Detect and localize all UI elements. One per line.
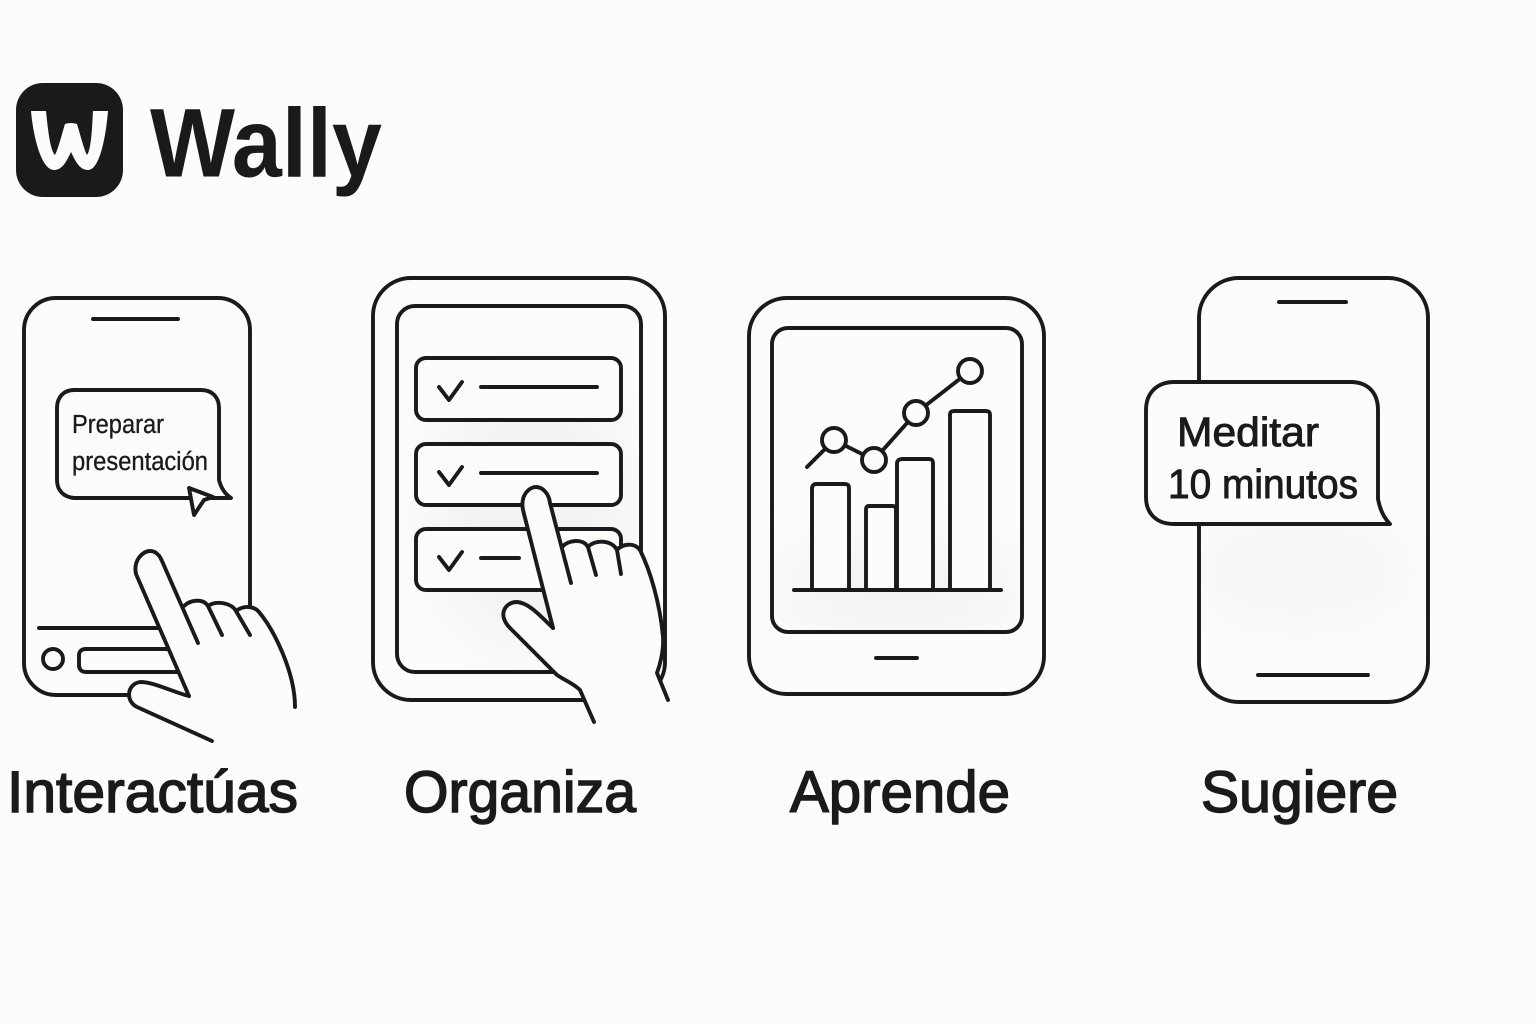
label: Sugiere: Sugiere [1201, 760, 1398, 825]
logo and brand name [16, 83, 382, 198]
task row 1 [416, 358, 621, 420]
home indicator [1258, 673, 1368, 677]
tablet outer frame [373, 278, 665, 700]
bubble text: presentación [72, 448, 208, 476]
phone speaker [93, 317, 178, 321]
screen shading [465, 422, 595, 610]
tablet screen [772, 328, 1022, 632]
phone outline [24, 298, 250, 695]
chat bubble [1146, 382, 1390, 524]
panel: Aprende [749, 298, 1044, 694]
tablet screen [397, 306, 641, 672]
task row 3 [416, 529, 621, 590]
label: Interactúas: Interactúas [7, 760, 298, 825]
icon: pointing hand [503, 487, 668, 722]
screen shading [851, 580, 949, 604]
phone shading [1190, 520, 1410, 620]
icon: pointing hand [129, 551, 295, 741]
home indicator [876, 656, 917, 660]
bubble text: Meditar [1177, 409, 1319, 455]
icon: Wally logo [16, 83, 123, 197]
label: Organiza: Organiza [404, 760, 637, 825]
panel: Organiza [373, 278, 668, 722]
label: Aprende: Aprende [790, 760, 1010, 825]
bubble text: Preparar [72, 411, 164, 439]
panel: Interactúas [24, 298, 295, 741]
icon: cursor arrow [189, 488, 213, 515]
input bar [39, 628, 180, 672]
brand name: Wally [150, 88, 382, 198]
task row 2 [416, 444, 621, 505]
bar chart [794, 411, 1001, 590]
tablet outer frame [749, 298, 1044, 694]
panel: Sugiere [1146, 278, 1428, 702]
line chart [807, 359, 982, 472]
phone speaker [1279, 300, 1346, 304]
chat bubble [57, 390, 231, 498]
bubble text: 10 minutos [1168, 461, 1358, 507]
phone outline [1199, 278, 1428, 702]
